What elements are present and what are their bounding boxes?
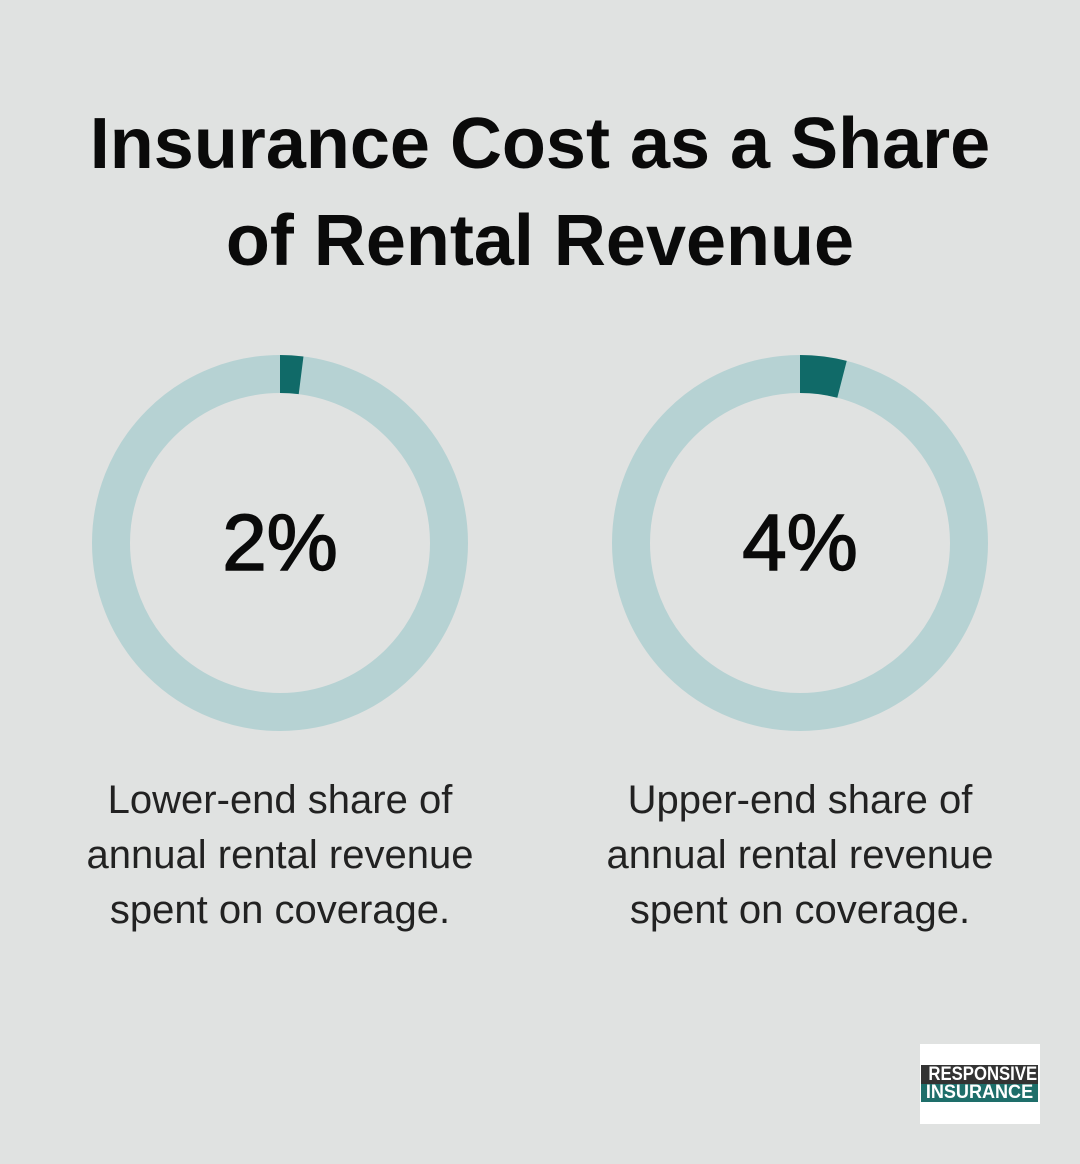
label: upper-end: annual rental revenue [607,833,993,877]
label: upper-end: Upper-end share of [628,778,972,822]
label: upper-end: spent on coverage. [630,888,970,932]
label: lower-end: annual rental revenue [87,833,473,877]
label: upper-end [607,778,993,932]
title: Insurance Cost as a Share [90,104,990,184]
donut: 4%: 4% [742,498,858,587]
logo [920,1044,1040,1124]
label: lower-end: Lower-end share of [108,778,452,822]
label: lower-end: spent on coverage. [110,888,450,932]
title [90,104,990,281]
label: lower-end [87,778,473,932]
donut: 4% [631,374,969,712]
donut: 2% [111,374,449,712]
donut: 2%: 2% [222,498,338,587]
title: of Rental Revenue [226,201,854,281]
